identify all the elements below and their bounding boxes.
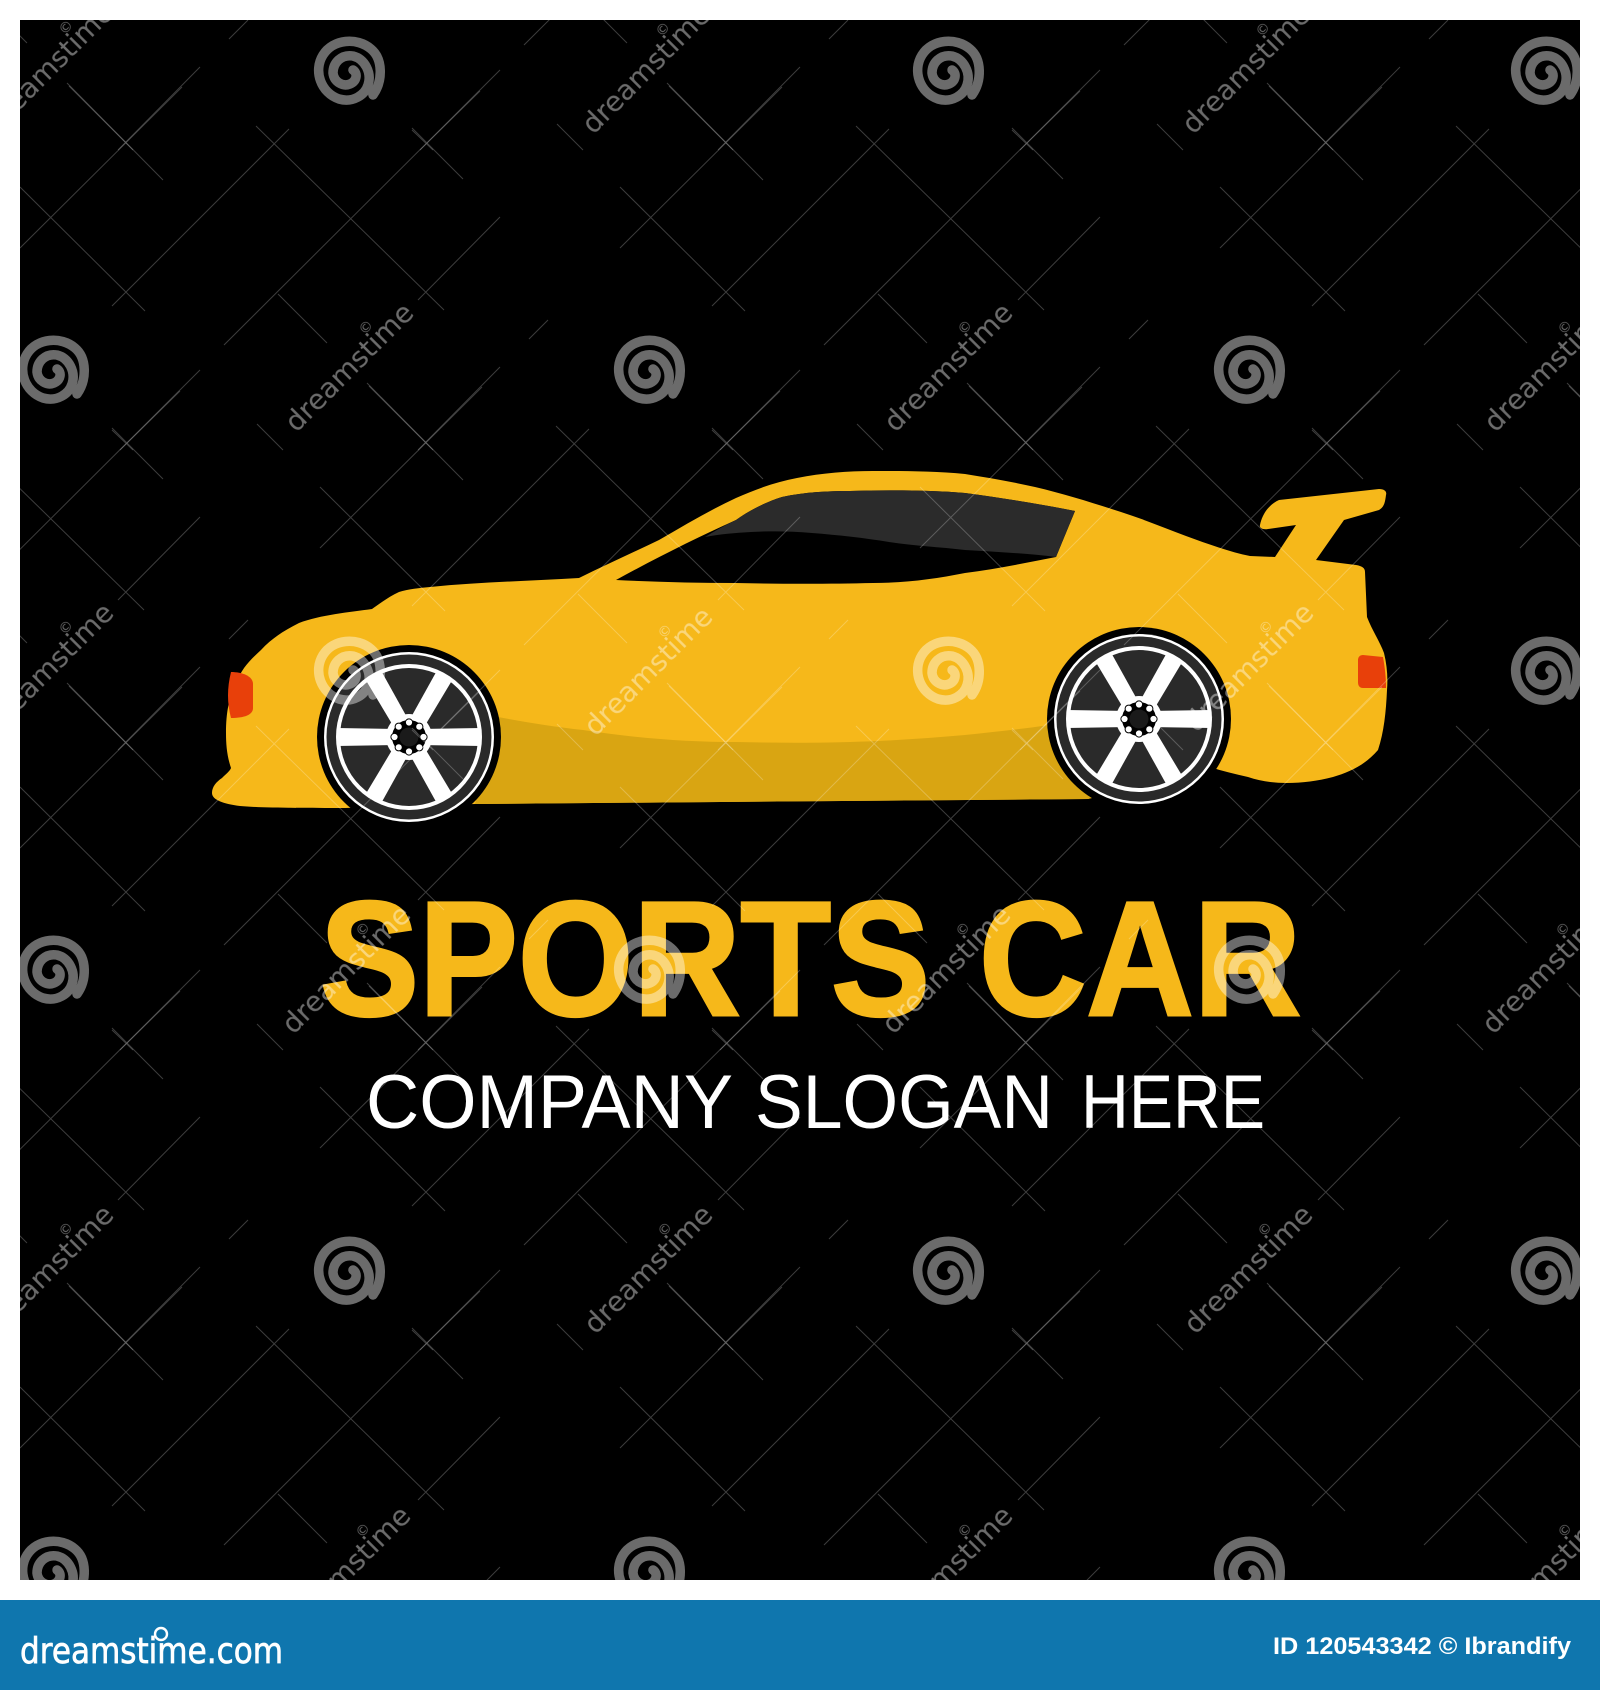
car body <box>212 471 1387 808</box>
watermark words: dreamstime <box>577 1198 719 1340</box>
watermark words: © <box>56 17 77 38</box>
watermark words: dreamstime <box>278 296 420 438</box>
watermark words: © <box>955 317 976 338</box>
watermark words: © <box>356 317 377 338</box>
watermark words: © <box>655 1219 676 1240</box>
watermark words: © <box>1555 1520 1576 1541</box>
watermark words: dreamstime <box>1175 0 1317 140</box>
watermark words: dreamstime <box>877 1499 1019 1641</box>
slogan: COMPANY <box>366 1060 733 1145</box>
watermark words: dreamstime <box>275 1499 417 1641</box>
watermark words: © <box>56 1219 77 1240</box>
watermark words: dreamstime <box>877 296 1019 438</box>
title: SPORTS <box>320 867 930 1050</box>
watermark words: © <box>353 919 374 940</box>
watermark words: dreamstime <box>575 0 717 140</box>
watermark words: dreamstime <box>1177 1198 1319 1340</box>
watermark words: © <box>1255 1219 1276 1240</box>
footer logo mark <box>155 1628 167 1640</box>
watermark words: © <box>655 621 676 642</box>
watermark words: © <box>955 1520 976 1541</box>
slogan <box>366 1060 1265 1145</box>
watermark words: dreamstime <box>275 898 417 1040</box>
footer logo: dreamstime.com <box>20 1631 283 1672</box>
watermark words: © <box>353 1520 374 1541</box>
car illustration <box>212 471 1387 829</box>
watermark words: dreamstime <box>875 898 1017 1040</box>
slogan: HERE <box>1081 1060 1265 1145</box>
watermark words: © <box>1256 617 1277 638</box>
rear light <box>1358 655 1386 688</box>
slogan: SLOGAN <box>755 1060 1053 1145</box>
window <box>616 490 1075 584</box>
front wheel <box>317 645 501 829</box>
watermark words: © <box>1553 919 1574 940</box>
watermark words: © <box>953 919 974 940</box>
watermark words: © <box>1253 19 1274 40</box>
watermark words: © <box>1555 317 1576 338</box>
window glass highlight <box>705 490 1075 557</box>
watermark words: dreamstime <box>1178 596 1320 738</box>
watermark words: © <box>56 617 77 638</box>
front light <box>228 672 253 718</box>
rear wheel <box>1047 627 1231 811</box>
lower body shadow <box>475 717 1100 804</box>
watermark words: © <box>653 19 674 40</box>
title: CAR <box>979 867 1301 1050</box>
watermark words: dreamstime <box>577 600 719 742</box>
title <box>320 867 1301 1050</box>
footer band <box>0 1600 1600 1690</box>
image credit: ID 120543342 © Ibrandify <box>1273 1633 1572 1660</box>
